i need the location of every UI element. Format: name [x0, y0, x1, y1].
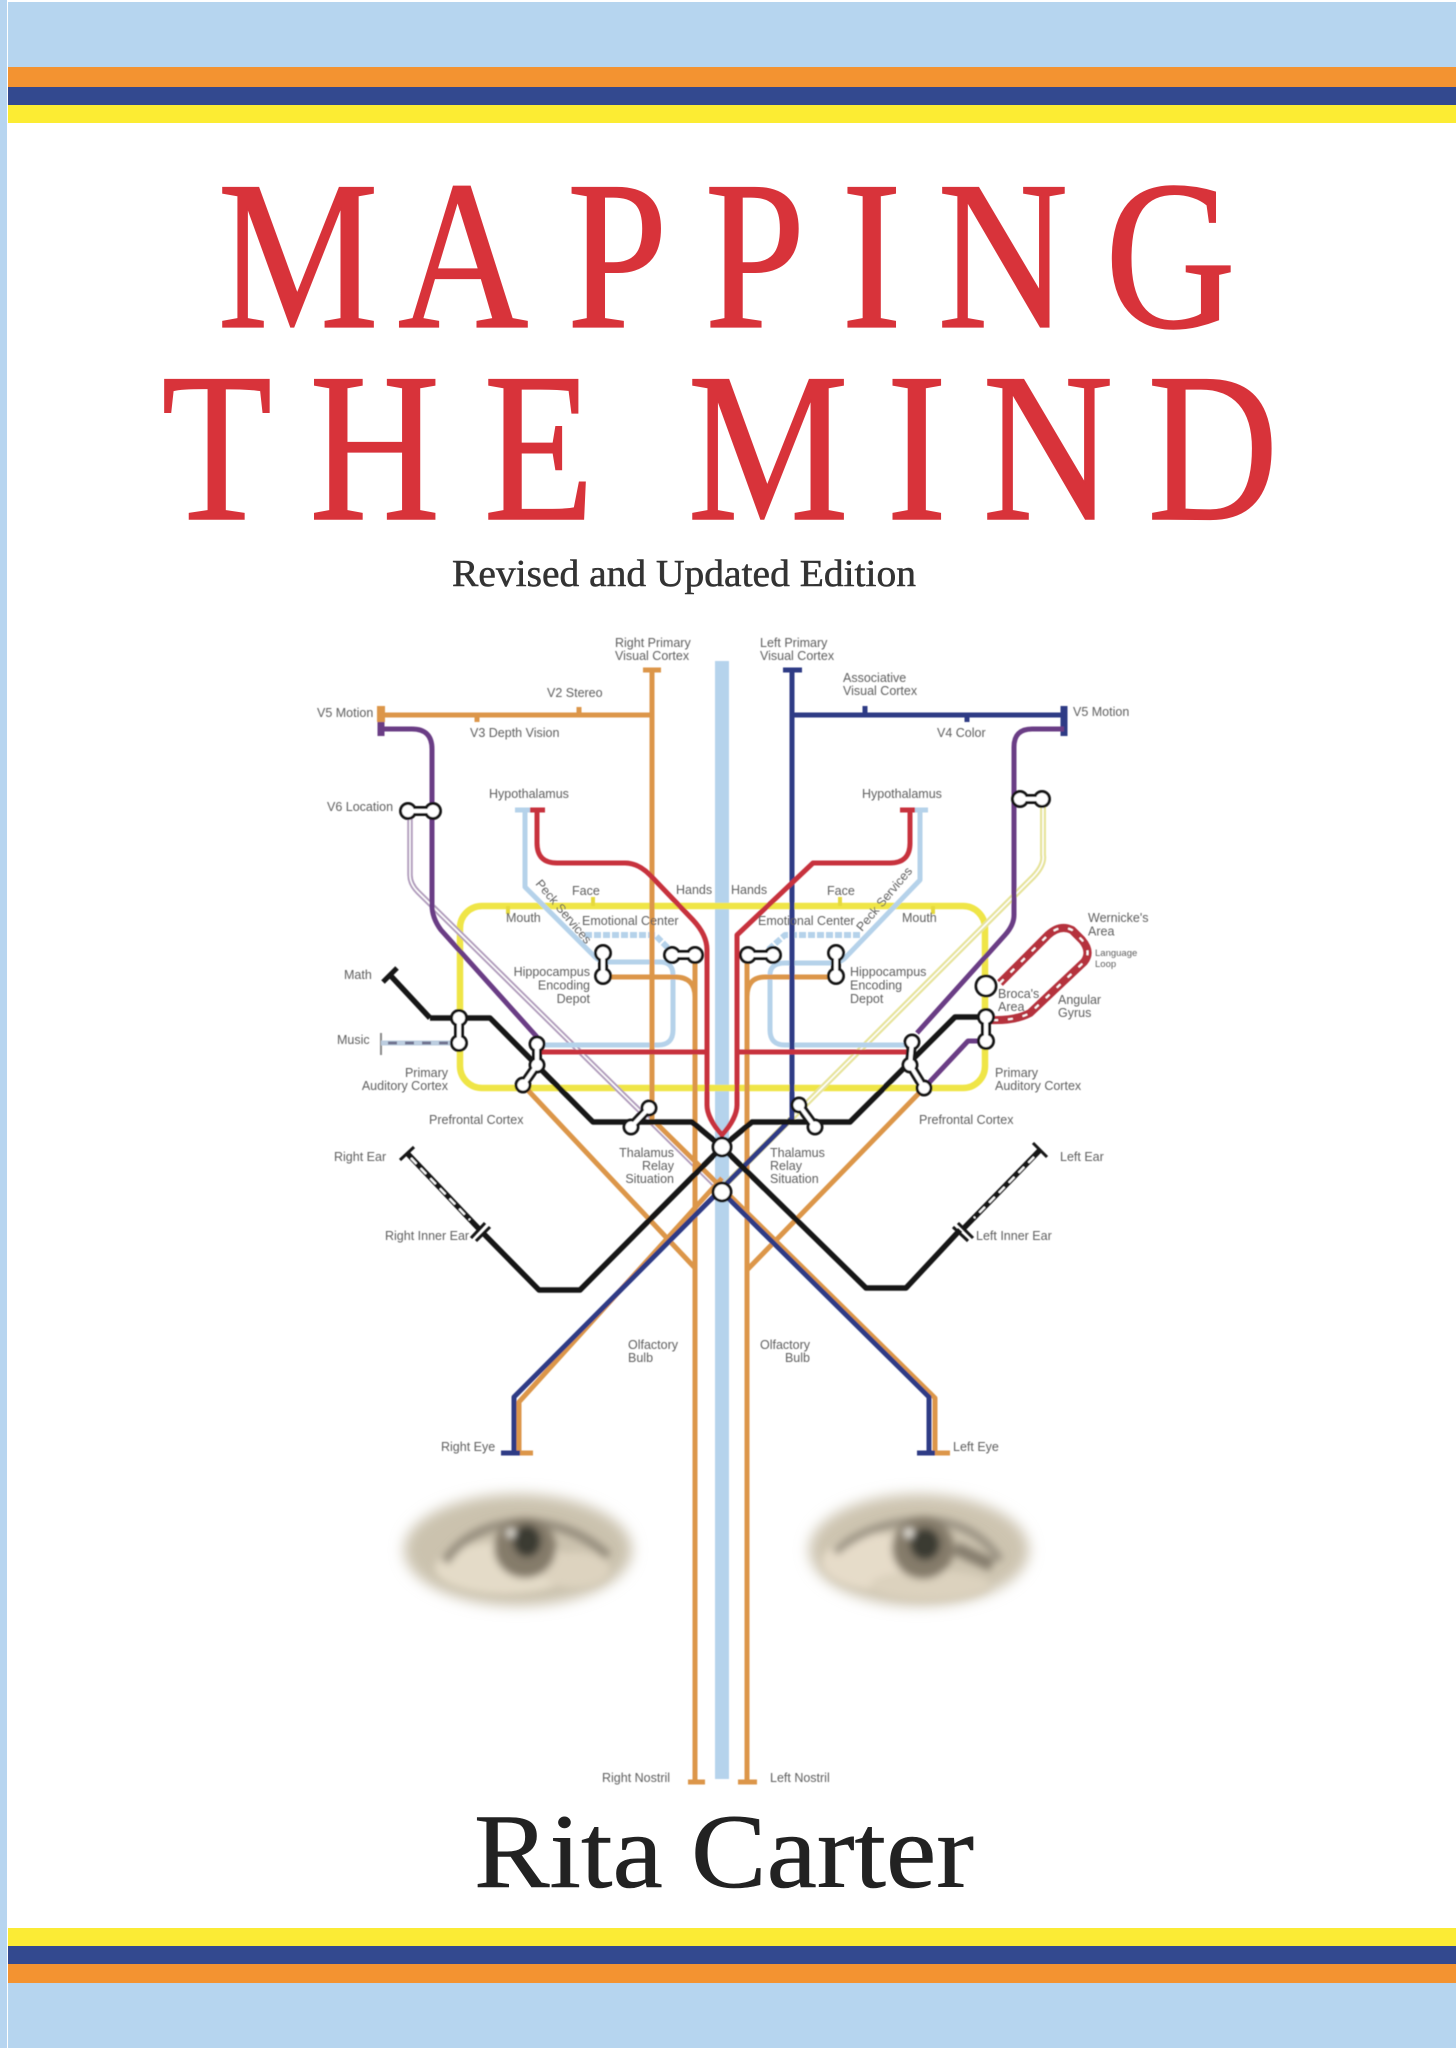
- interchange: hippocampus left: [596, 946, 610, 984]
- author name: Rita Carter: [474, 1793, 974, 1910]
- label: left primary visual cortex: Left Primary: [760, 636, 827, 650]
- red lines: [530, 810, 915, 1135]
- bottom colour bands: [8, 1928, 1456, 2048]
- label: left nostril: Left Nostril: [770, 1771, 830, 1785]
- label: hippocampus right: Depot: [850, 992, 884, 1006]
- interchange: right auditory: [978, 1010, 994, 1048]
- interchange: lower right: [792, 1098, 822, 1134]
- label: thalamus right: Thalamus: [770, 1146, 825, 1160]
- interchange: upper right: [1012, 792, 1050, 806]
- orange vertical and branch lines: [381, 670, 950, 1782]
- title line: Mapping: MAPPING: [218, 137, 1236, 373]
- label: hands right: Hands: [731, 883, 767, 897]
- label: Broca's area: Broca's: [998, 987, 1039, 1001]
- label: language loop: Language: [1095, 948, 1137, 959]
- label: V6 location: V6 Location: [327, 800, 393, 814]
- interchange: emotional centre right: [740, 948, 780, 962]
- label: hands left: Hands: [676, 883, 712, 897]
- label: primary auditory cortex left: Auditory Cortex: [362, 1079, 449, 1093]
- label: language loop: Loop: [1095, 959, 1116, 970]
- label: primary auditory cortex left: Primary: [405, 1066, 448, 1080]
- label: left primary visual cortex: Visual Cortex: [760, 649, 835, 663]
- label: olfactory bulb right: Olfactory: [760, 1338, 810, 1352]
- label: face left: Face: [572, 884, 600, 898]
- station: Broca's area: [976, 976, 996, 996]
- label: right inner ear: Right Inner Ear: [385, 1229, 469, 1243]
- title: [162, 137, 1278, 565]
- label: hippocampus right: Encoding: [850, 978, 902, 992]
- label: Wernicke's area: Area: [1088, 924, 1114, 938]
- label: hippocampus right: Hippocampus: [850, 965, 926, 979]
- label: music: Music: [337, 1033, 370, 1047]
- interchange: lower left: [624, 1101, 656, 1134]
- label: left ear: Left Ear: [1060, 1150, 1104, 1164]
- label: hypothalamus left: Hypothalamus: [489, 787, 569, 801]
- label: V2 stereo: V2 Stereo: [547, 686, 603, 700]
- interchange: emotional centre left: [664, 948, 702, 962]
- yellow loop line: [460, 906, 985, 1088]
- label: thalamus left: Thalamus: [619, 1146, 674, 1160]
- label: face right: Face: [827, 884, 855, 898]
- label: thalamus right: Situation: [770, 1172, 819, 1186]
- label: prefrontal cortex right: Prefrontal Cortex: [919, 1113, 1014, 1127]
- label: right primary visual cortex: Visual Cortex: [615, 649, 690, 663]
- ear dashed lines: [400, 1143, 1047, 1241]
- pale double line right: [722, 805, 1043, 1188]
- eye: right on page: [809, 1494, 1029, 1606]
- label: Broca's area: Area: [998, 1000, 1024, 1014]
- label: mouth right: Mouth: [902, 911, 937, 925]
- label: thalamus left: Situation: [625, 1172, 674, 1186]
- label: peck services left: Peck Services: [533, 877, 594, 947]
- label: primary auditory cortex right: Auditory Cortex: [995, 1079, 1082, 1093]
- label: thalamus left: Relay: [642, 1159, 675, 1173]
- interchange stations: [400, 792, 1050, 1201]
- label: olfactory bulb right: Bulb: [785, 1351, 810, 1365]
- label: olfactory bulb left: Bulb: [628, 1351, 653, 1365]
- subtitle: Revised and Updated Edition: [452, 553, 916, 595]
- label: Wernicke's area: Wernicke's: [1088, 911, 1149, 925]
- label: angular gyrus: Angular: [1058, 993, 1101, 1007]
- label: V4 color: V4 Color: [937, 726, 986, 740]
- label: hippocampus left: Depot: [557, 992, 591, 1006]
- station: thalamus lower: [713, 1183, 731, 1201]
- label: V5 motion left: V5 Motion: [317, 706, 373, 720]
- label: right primary visual cortex: Right Primary: [615, 636, 691, 650]
- interchange: left triple: [516, 1037, 544, 1092]
- label: peck services right: Peck Services: [854, 864, 915, 934]
- label: primary auditory cortex right: Primary: [995, 1066, 1038, 1080]
- interchange: V6 location: [400, 804, 440, 818]
- pale double line left: [410, 815, 722, 1192]
- music dashed line: [381, 1033, 455, 1055]
- label: hippocampus left: Encoding: [538, 978, 590, 992]
- interchange: hippocampus right: [828, 946, 844, 984]
- label: right nostril: Right Nostril: [602, 1771, 670, 1785]
- title line: The Mind: THE MIND: [162, 329, 1278, 565]
- light blue lines: [515, 810, 928, 1045]
- label: V5 motion right: V5 Motion: [1073, 705, 1129, 719]
- purple lines: [381, 722, 1064, 1088]
- interchange: right triple: [903, 1035, 931, 1095]
- central light blue line: [715, 661, 729, 1779]
- label: associative visual cortex: Visual Cortex: [843, 684, 918, 698]
- station labels: [317, 636, 1149, 1785]
- navy lines: [501, 670, 1064, 1453]
- label: left inner ear: Left Inner Ear: [976, 1229, 1052, 1243]
- label: left eye: Left Eye: [953, 1440, 999, 1454]
- yellow line ticks: [508, 897, 933, 914]
- label: math: Math: [344, 968, 372, 982]
- label: V3 depth vision: V3 Depth Vision: [470, 726, 559, 740]
- black lines: [383, 968, 987, 1290]
- label: hypothalamus right: Hypothalamus: [862, 787, 942, 801]
- label: mouth left: Mouth: [506, 911, 541, 925]
- label: associative visual cortex: Associative: [843, 671, 906, 685]
- label: angular gyrus: Gyrus: [1058, 1006, 1091, 1020]
- label: thalamus right: Relay: [770, 1159, 803, 1173]
- brain metro map diagram: [317, 636, 1149, 1785]
- label: olfactory bulb left: Olfactory: [628, 1338, 678, 1352]
- label: emotional center left: Emotional Center: [582, 914, 679, 928]
- interchange: music: [452, 1010, 466, 1050]
- label: emotional center right: Emotional Center: [758, 914, 855, 928]
- label: prefrontal cortex left: Prefrontal Cortex: [429, 1113, 524, 1127]
- eye: left on page: [404, 1494, 632, 1606]
- station: thalamus upper: [713, 1138, 731, 1156]
- label: right eye: Right Eye: [441, 1440, 495, 1454]
- label: hippocampus left: Hippocampus: [514, 965, 590, 979]
- top colour bands: [8, 2, 1456, 123]
- label: right ear: Right Ear: [334, 1150, 386, 1164]
- left edge strip: [0, 0, 7, 2048]
- language loop dashed line: [990, 928, 1088, 1020]
